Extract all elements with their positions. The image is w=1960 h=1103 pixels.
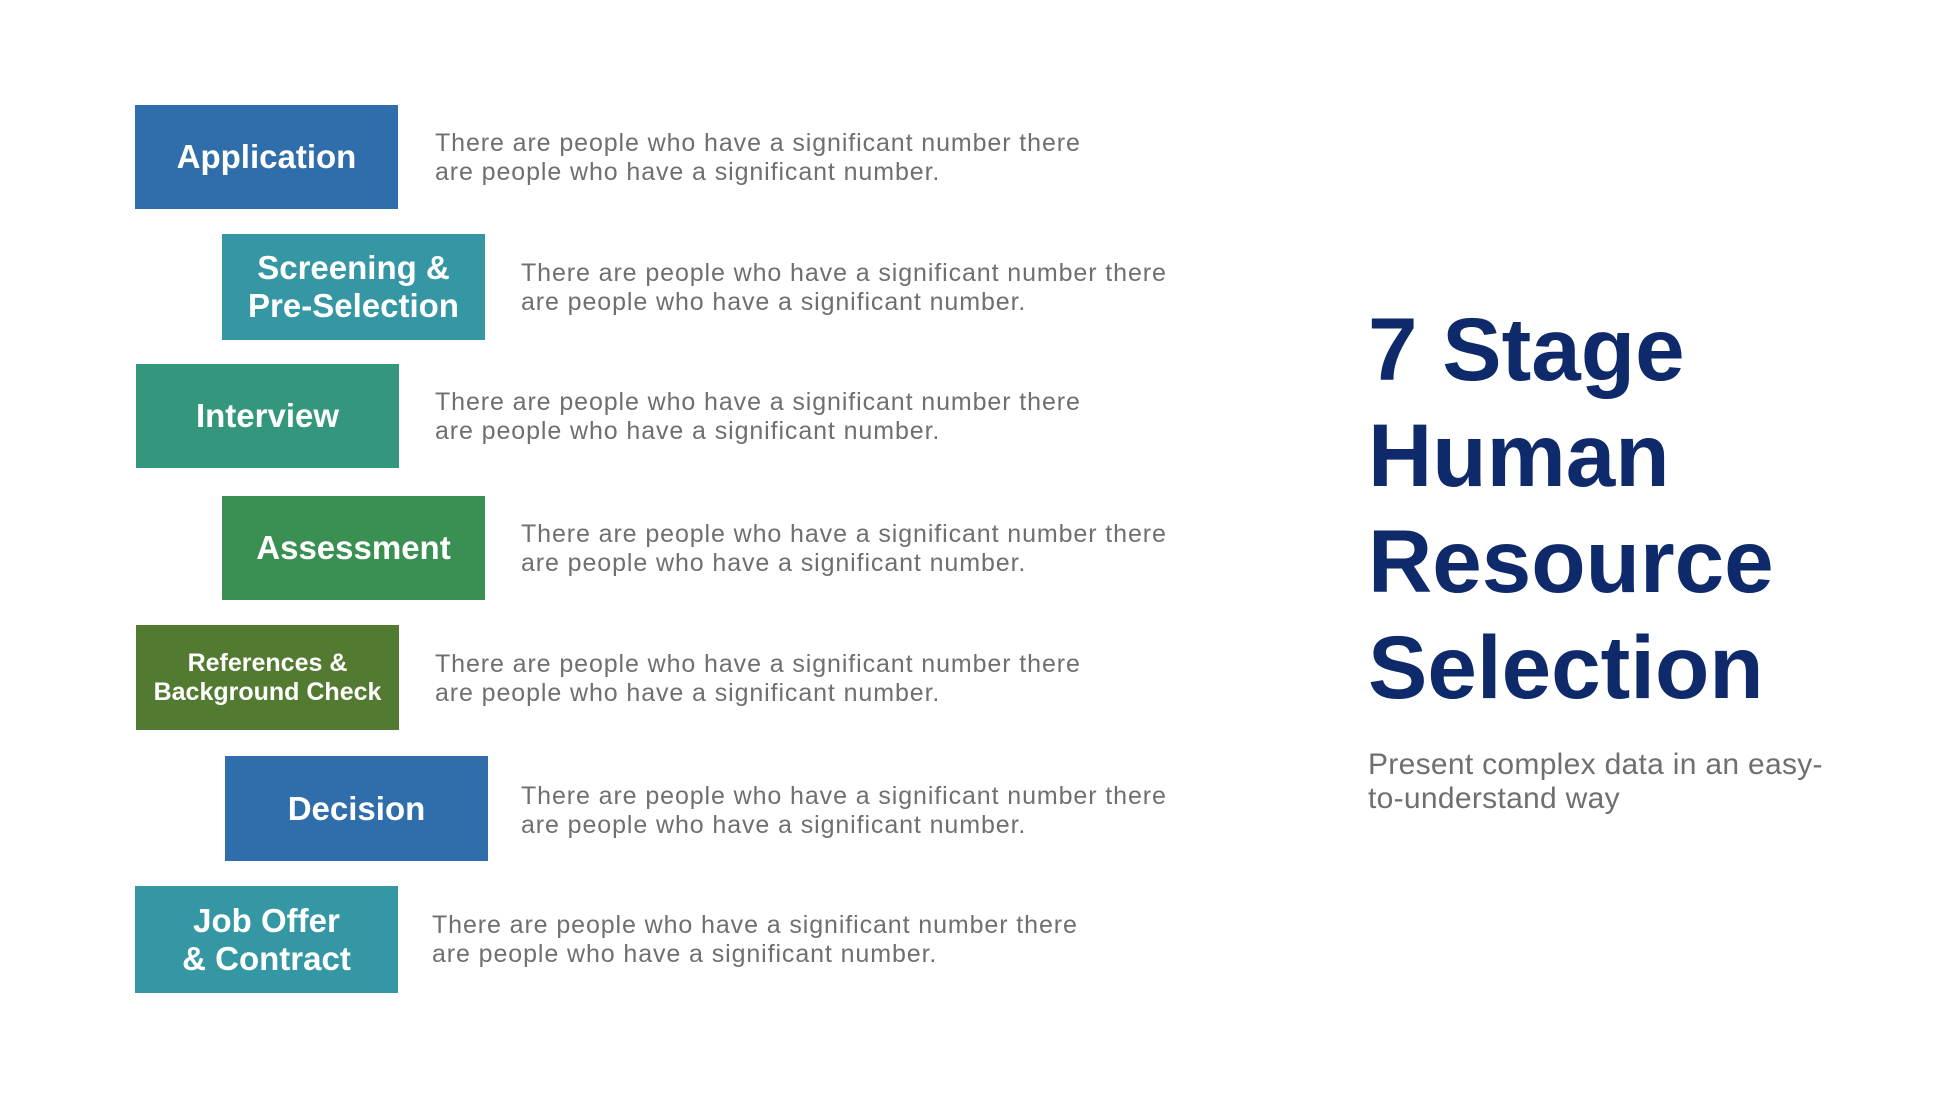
stage 7: Job Offer: & Contract (182, 940, 351, 976)
text 4: are people who have a significant number. (521, 549, 1026, 577)
text 2: are people who have a significant number. (521, 288, 1026, 316)
title: Human (1368, 405, 1670, 505)
text 4: There are people who have a significant number there (521, 520, 1167, 548)
title: 7 Stage (1368, 299, 1685, 399)
text 6 (521, 782, 1167, 839)
stage 2: Screening (222, 234, 485, 340)
text 3 (435, 388, 1081, 445)
stage 6: Decision: Decision (288, 790, 425, 826)
text 7 (432, 911, 1078, 968)
title: Resource (1368, 511, 1774, 611)
text 3: are people who have a significant number. (435, 417, 940, 445)
stage 5: References: Background Check (154, 678, 381, 706)
stage 1: Application: Application (177, 138, 356, 175)
stage 5: References (136, 625, 399, 730)
title (1368, 299, 1774, 717)
stage 3: Interview: Interview (196, 397, 339, 434)
text 2 (521, 259, 1167, 316)
stage 7: Job Offer: Job Offer (193, 902, 340, 938)
title: Selection (1368, 617, 1764, 717)
text 4 (521, 520, 1167, 577)
subtitle: to-understand way (1368, 782, 1620, 815)
stage 4: Assessment: Assessment (256, 529, 451, 566)
text 7: are people who have a significant number. (432, 940, 937, 968)
text 5: are people who have a significant number. (435, 679, 940, 707)
text 5 (435, 650, 1081, 707)
text 6: are people who have a significant number. (521, 811, 1026, 839)
text 5: There are people who have a significant number there (435, 650, 1081, 678)
text 1: are people who have a significant number. (435, 158, 940, 186)
subtitle (1368, 748, 1823, 815)
text 1 (435, 129, 1081, 186)
text 1: There are people who have a significant number there (435, 129, 1081, 157)
text 2: There are people who have a significant number there (521, 259, 1167, 287)
subtitle: Present complex data in an easy- (1368, 748, 1823, 781)
stage 3: Interview (136, 364, 399, 468)
stage 5: References: References & (188, 648, 347, 676)
text 7: There are people who have a significant number there (432, 911, 1078, 939)
stage 1: Application (135, 105, 398, 209)
stage 7: Job Offer (135, 886, 398, 993)
stage 2: Screening: Pre-Selection (248, 287, 459, 324)
text 3: There are people who have a significant number there (435, 388, 1081, 416)
stage 6: Decision (225, 756, 488, 861)
stage 2: Screening: Screening & (257, 249, 450, 286)
stage 4: Assessment (222, 496, 485, 600)
text 6: There are people who have a significant number there (521, 782, 1167, 810)
